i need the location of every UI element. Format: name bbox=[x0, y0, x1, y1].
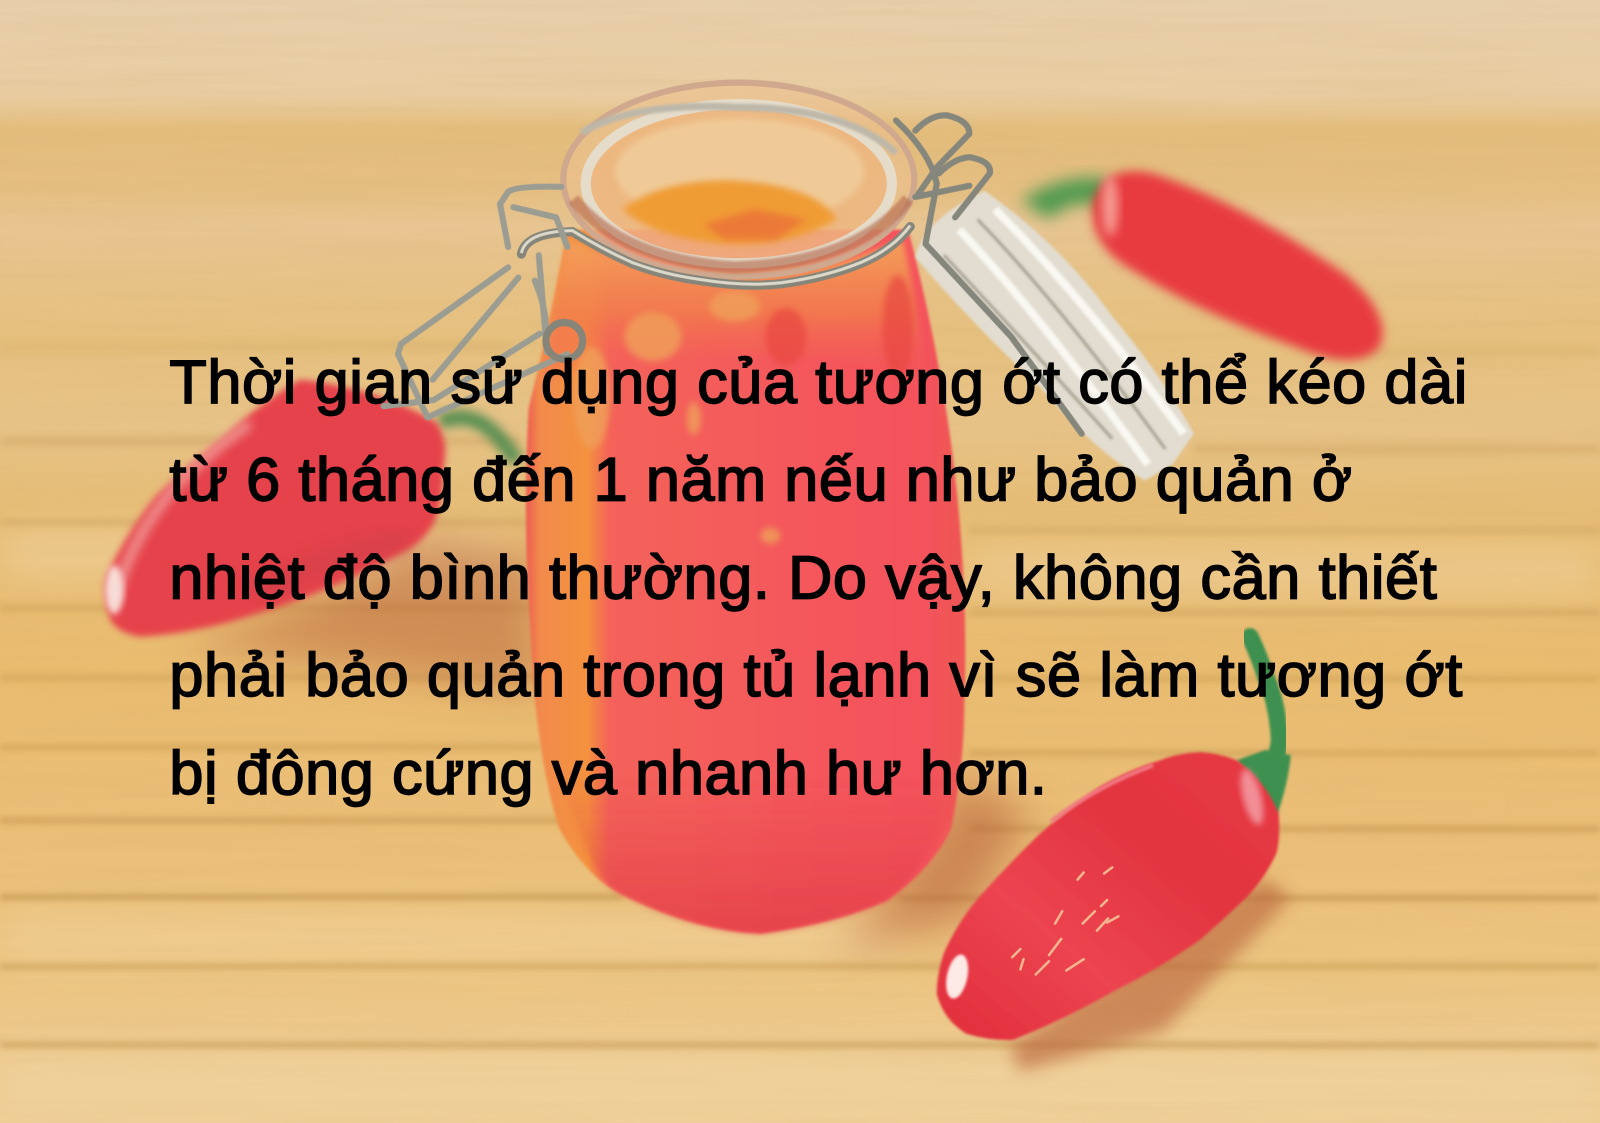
sauce surface in jar bbox=[622, 180, 837, 244]
text block: Thời gian sử dụng của tương ớt có thể kéo dài bbox=[169, 348, 1467, 416]
text block bbox=[169, 348, 1467, 807]
text block: từ 6 tháng đến 1 năm nếu như bảo quản ở bbox=[169, 446, 1352, 514]
jar rim and mouth bbox=[563, 83, 914, 277]
chili: left bbox=[105, 380, 517, 637]
orange upper part of sauce bbox=[541, 240, 923, 388]
jar base shading bbox=[563, 776, 954, 934]
chili: bottom right bbox=[937, 637, 1291, 1040]
chili stem bbox=[1250, 637, 1280, 776]
open glass lid bbox=[896, 115, 1194, 481]
chili highlights bbox=[942, 952, 972, 1001]
text block: phải bảo quản trong tủ lạnh vì sẽ làm tương ớt bbox=[169, 641, 1462, 709]
left wire clasp bbox=[384, 187, 583, 417]
jar body with chili sauce bbox=[526, 230, 965, 934]
shadows on the table bbox=[184, 536, 1291, 1071]
chili body bbox=[937, 752, 1279, 1040]
glass neck reflection bbox=[573, 199, 908, 267]
lid wire hinge bbox=[896, 115, 1082, 434]
text block: bị đông cứng và nhanh hư hơn. bbox=[169, 739, 1047, 807]
chili: top right bbox=[1020, 171, 1383, 360]
text block: nhiệt độ bình thường. Do vậy, không cần thiết bbox=[169, 543, 1437, 611]
wire collar bbox=[521, 227, 910, 285]
jar bbox=[521, 83, 965, 934]
